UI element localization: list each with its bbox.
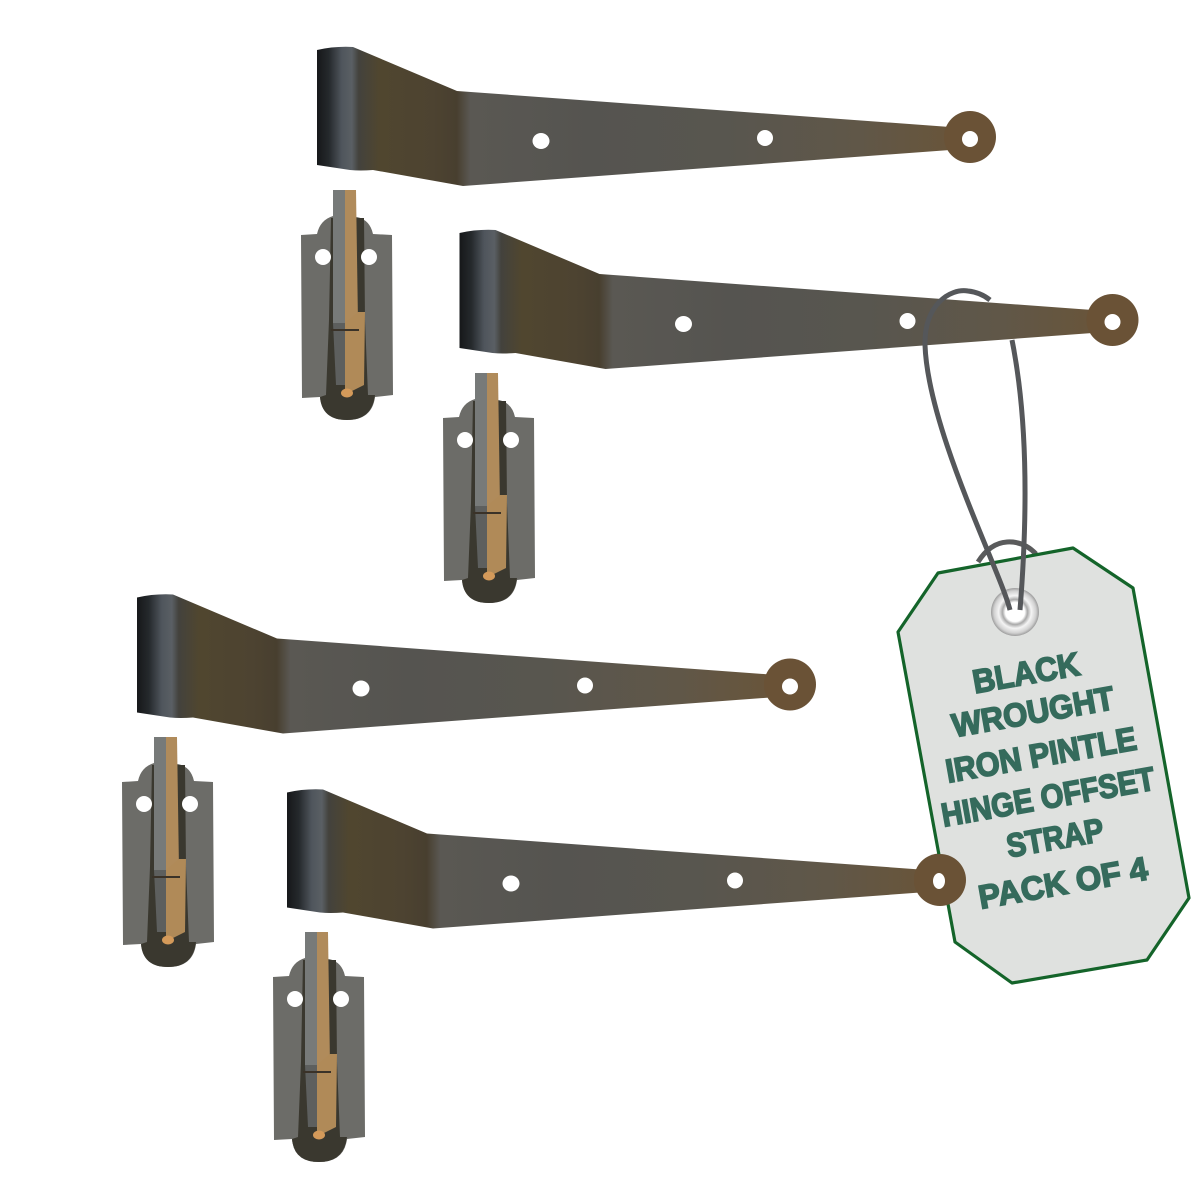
hinge strap 4 xyxy=(287,789,966,928)
tag text: WROUGHT xyxy=(949,679,1117,744)
hinge strap 3 xyxy=(137,594,816,734)
string loop behind tag xyxy=(978,542,1036,562)
string left strand xyxy=(925,291,1010,610)
hinge strap 2 xyxy=(460,230,1138,369)
tag text: IRON PINTLE xyxy=(943,720,1139,790)
tag body xyxy=(898,548,1189,983)
tag text: PACK OF 4 xyxy=(976,849,1151,916)
tag text: HINGE OFFSET xyxy=(938,760,1158,834)
tag text: BLACK xyxy=(970,645,1083,700)
tag grommet xyxy=(991,588,1039,636)
string right strand xyxy=(1012,340,1025,610)
tag text: STRAP xyxy=(1004,811,1106,864)
disc of hinge 4 over tag xyxy=(914,854,966,906)
hinge strap 1 xyxy=(317,47,996,186)
price tag xyxy=(898,548,1189,983)
tag text xyxy=(938,645,1158,916)
pintle plate 1 xyxy=(301,190,393,420)
pintle plate 3 xyxy=(122,737,214,967)
pintle plate 2 xyxy=(443,373,535,603)
pintle plate 4 xyxy=(273,932,365,1162)
